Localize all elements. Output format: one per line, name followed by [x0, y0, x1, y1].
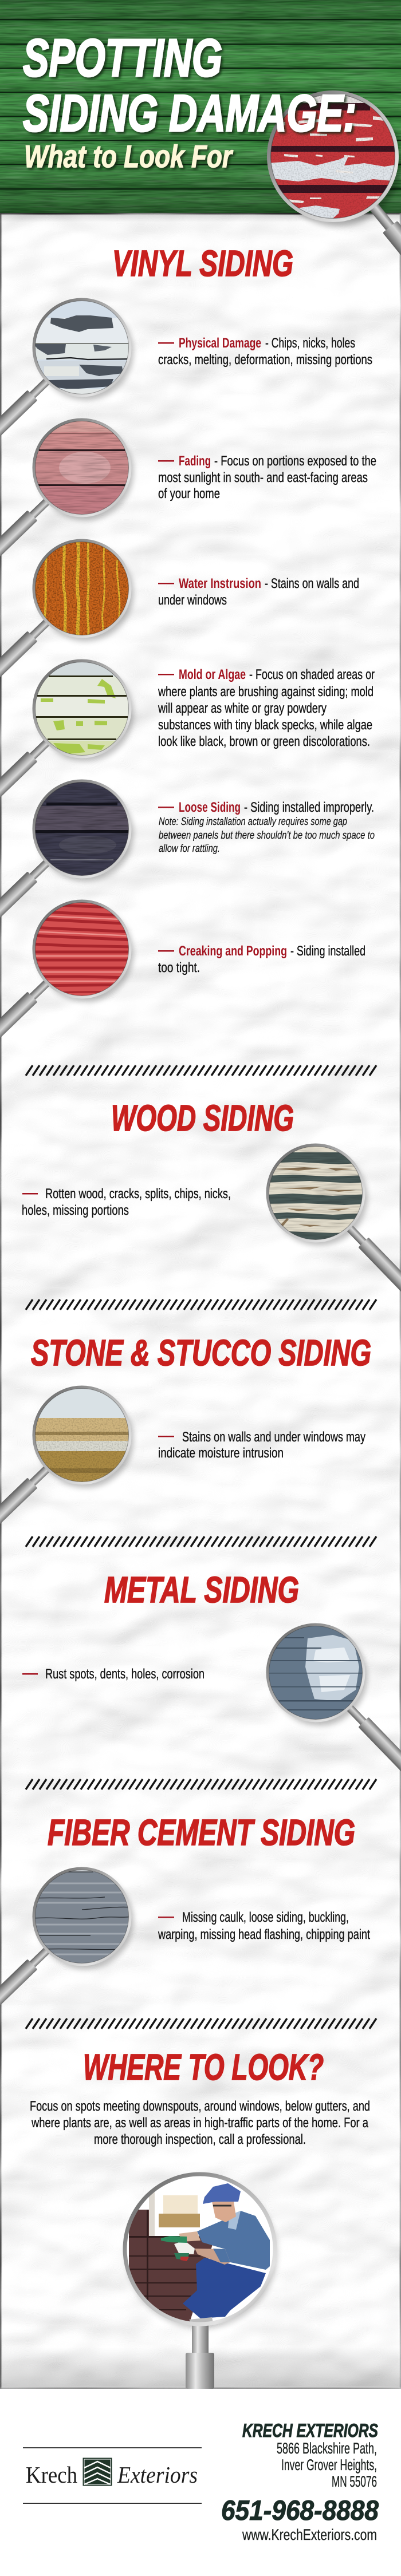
- heading: wood siding: WOOD SIDING: [111, 1097, 294, 1139]
- text: loose siding: Note: Siding installation actually requires some gap: [159, 816, 347, 828]
- title line 1: SPOTTING: [23, 28, 222, 88]
- header magnifier: peeling red siding: [267, 90, 401, 255]
- paragraph: where to look: [30, 2099, 370, 2147]
- worker trousers: [183, 2258, 266, 2318]
- text: metal damage: Rust spots, dents, holes, corrosion: [45, 1666, 205, 1682]
- worker shirt: [197, 2211, 270, 2270]
- text: wood damage: Rotten wood, cracks, splits, chips, nicks,: [45, 1186, 231, 1202]
- magnifier: stucco staining: [0, 1384, 133, 1575]
- magnifier: rotten wood: [266, 1144, 401, 1291]
- forearm and glove: [179, 2231, 200, 2242]
- text: fading: Fading: [179, 453, 211, 469]
- text: water intrusion: Water Instrusion: [179, 576, 261, 591]
- footer: [0, 2389, 401, 2576]
- text: fading: of your home: [158, 486, 220, 501]
- logo: Krech Exteriors: [23, 2447, 202, 2504]
- section: metal siding: [22, 1576, 401, 1789]
- text: physical damage: - Chips, nicks, holes: [265, 335, 355, 351]
- heading: vinyl siding: VINYL SIDING: [112, 243, 293, 284]
- paragraph: where to look: more thorough inspection, call a professional.: [94, 2132, 306, 2147]
- logo: Krech Exteriors: Exteriors: [117, 2462, 198, 2488]
- title: [23, 28, 356, 174]
- section: wood siding: [22, 1104, 401, 1310]
- text: creaking and popping: too tight.: [158, 960, 200, 975]
- contact details: [221, 2420, 379, 2543]
- text: wood damage: holes, missing portions: [22, 1203, 129, 1218]
- magnifier: physical damage: [0, 296, 133, 488]
- section: fiber cement siding: [0, 1812, 370, 2057]
- magnifier: creaking and popping: [0, 898, 133, 1089]
- text: fiber cement damage: Missing caulk, loose siding, buckling,: [182, 1910, 349, 1925]
- section: vinyl siding: [0, 243, 376, 1089]
- logo: Krech Exteriors: Krech: [26, 2462, 77, 2488]
- text: physical damage: Physical Damage: [179, 335, 261, 351]
- contact details: MN 55076: [332, 2473, 377, 2490]
- section: stone and stucco siding: [0, 1339, 371, 1547]
- magnifier: loose siding: [0, 777, 133, 969]
- worker cap: [203, 2183, 241, 2204]
- heading: metal siding: METAL SIDING: [104, 1569, 299, 1610]
- magnifier: fiber cement cracks: [0, 1864, 133, 2057]
- magnifier: fading: [0, 416, 133, 608]
- text: mold or algae: [158, 667, 375, 749]
- subtitle: What to Look For: [24, 139, 233, 174]
- magnifier: mold or algae: [0, 657, 133, 849]
- text: loose siding: [158, 800, 375, 855]
- text: loose siding: Loose Siding: [179, 800, 241, 815]
- magnifier: water intrusion: [0, 537, 133, 729]
- text: creaking and popping: - Siding installed: [290, 943, 365, 959]
- text: creaking and popping: Creaking and Popping: [179, 943, 287, 959]
- section: where to look: [30, 2046, 370, 2389]
- drill: [161, 2236, 187, 2243]
- text: stucco damage: [158, 1429, 365, 1461]
- text: fading: [158, 453, 376, 501]
- text: physical damage: [158, 335, 372, 368]
- text: wood damage: [22, 1186, 231, 1218]
- text: water intrusion: - Stains on walls and: [265, 576, 359, 591]
- text: stucco damage: indicate moisture intrusion: [158, 1445, 284, 1461]
- text: fiber cement damage: [158, 1910, 370, 1942]
- contact details: 651-968-8888: [221, 2495, 379, 2526]
- magnifier handle: [186, 2321, 214, 2389]
- icon: chevrons: [83, 2458, 112, 2486]
- text: water intrusion: under windows: [158, 592, 227, 608]
- magnifier: worker inspecting siding: [120, 2170, 281, 2389]
- magnifier: dented metal: [266, 1623, 401, 1771]
- text: mold or algae: will appear as white or gray powdery: [158, 701, 327, 716]
- text: mold or algae: Mold or Algae: [179, 667, 246, 682]
- text: creaking and popping: [158, 943, 365, 975]
- text: water intrusion: [158, 576, 359, 608]
- text: loose siding: allow for rattling.: [159, 843, 220, 855]
- worker head: [212, 2202, 236, 2222]
- header banner: green planks: [0, 0, 401, 213]
